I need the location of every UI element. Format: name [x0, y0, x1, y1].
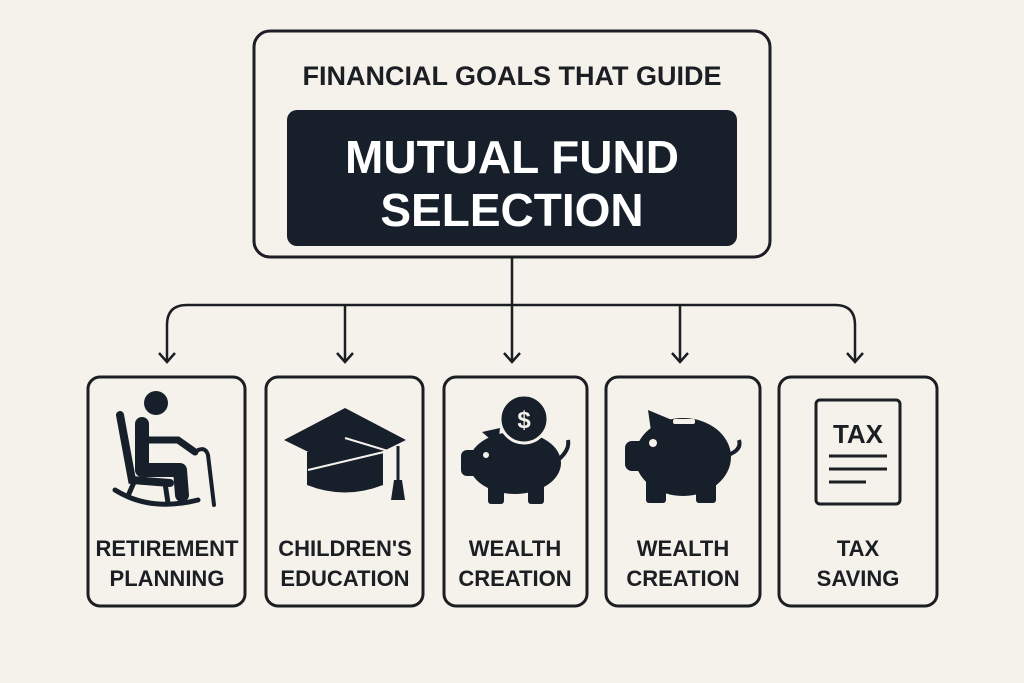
title banner: MUTUAL FUND — [345, 131, 679, 183]
panel: children's education: CHILDREN'S — [278, 536, 412, 561]
heading: financial goals: FINANCIAL GOALS THAT GUIDE — [302, 61, 722, 91]
connector arrows — [159, 258, 863, 362]
panel: wealth creation 2: CREATION — [626, 566, 740, 591]
title banner: SELECTION — [380, 184, 644, 236]
panel: wealth creation 1 — [444, 377, 587, 606]
icon: tax document: TAX — [833, 419, 884, 449]
title banner — [287, 110, 737, 246]
panel: tax saving: SAVING — [817, 566, 899, 591]
panel: tax saving: TAX — [837, 536, 880, 561]
panel: wealth creation 1: CREATION — [458, 566, 572, 591]
icon: piggy bank with coin — [461, 395, 568, 504]
icon: piggy bank — [625, 410, 740, 503]
panel: retirement planning: RETIREMENT — [96, 536, 239, 561]
header box — [254, 31, 770, 257]
icon: tax document — [816, 400, 900, 504]
panel: retirement planning: PLANNING — [110, 566, 224, 591]
panel: wealth creation 2: WEALTH — [637, 536, 729, 561]
icon: piggy bank with coin: $ — [517, 407, 531, 434]
icon: rocking chair — [115, 391, 214, 505]
panel: retirement planning — [88, 377, 245, 606]
panel: wealth creation 2 — [606, 377, 760, 606]
panel: wealth creation 1: WEALTH — [469, 536, 561, 561]
panel: children's education: EDUCATION — [280, 566, 410, 591]
panel: children's education — [266, 377, 423, 606]
panel: tax saving — [779, 377, 937, 606]
icon: graduation cap — [284, 408, 406, 500]
